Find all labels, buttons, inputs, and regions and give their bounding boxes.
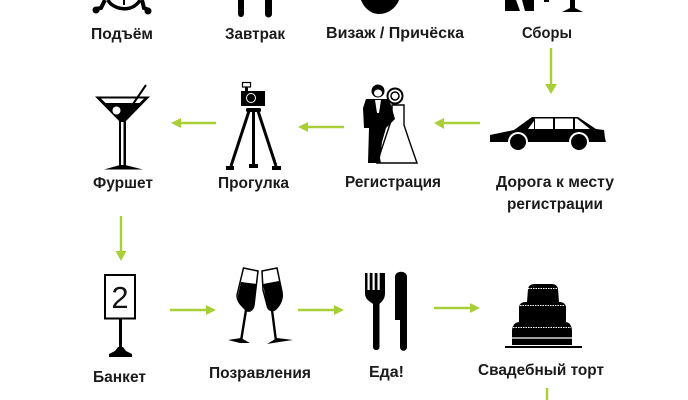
label: Завтрак: [225, 26, 285, 43]
label: Дорога к месту: [496, 174, 614, 191]
step: Сборы: [505, 0, 583, 42]
label: Позравления: [209, 365, 311, 382]
arrow: Позравления to Еда: [298, 305, 344, 315]
step: Свадебный торт: [478, 284, 604, 379]
step: Позравления: [209, 268, 311, 382]
step: Завтрак: [225, 0, 285, 43]
label: Сборы: [522, 25, 572, 42]
label: Прогулка: [218, 175, 289, 192]
icon: bride and groom: [363, 84, 417, 163]
icon: clinking champagne flutes: [228, 268, 293, 344]
step: Дорога к месту регистрации: [490, 117, 614, 213]
step: Еда!: [365, 272, 407, 381]
arrow: Дорога to Регистрация: [434, 118, 480, 129]
step: Визаж / Причёска: [326, 0, 464, 42]
icon: table number stand: 2: [111, 280, 129, 315]
arrow: Еда to торт: [434, 303, 480, 313]
label: Фуршет: [93, 175, 153, 192]
icon: fork and knife: [365, 272, 407, 351]
label: Регистрация: [345, 174, 441, 191]
step: Фуршет: [93, 85, 153, 192]
label: Подъём: [91, 26, 153, 43]
label: Свадебный торт: [478, 362, 604, 379]
arrow: Банкет to Позравления: [170, 305, 216, 315]
icon: cutlery handles: [238, 0, 272, 18]
arrow: торт continues down: [546, 388, 548, 400]
label line 2: регистрации: [507, 196, 603, 213]
icon: camera on tripod: [226, 82, 281, 170]
icon: tiered cake: [505, 284, 582, 348]
icon: suit and stand: [505, 0, 583, 12]
arrow: Регистрация to Прогулка: [298, 122, 344, 132]
icon: martini glass: [95, 85, 150, 170]
icon: limousine: [490, 117, 606, 152]
icon: alarm clock: [92, 0, 152, 14]
step: Прогулка: [218, 82, 289, 192]
step: Регистрация: [345, 84, 441, 191]
label: Еда!: [369, 364, 404, 381]
label: Банкет: [93, 369, 146, 386]
arrow: Прогулка to Фуршет: [171, 118, 216, 128]
label: Визаж / Причёска: [326, 25, 464, 42]
icon: brush: [361, 0, 399, 14]
step: Подъём: [91, 0, 153, 43]
arrow: Сборы to Дорога: [545, 48, 557, 94]
arrow: Фуршет to Банкет: [116, 216, 126, 261]
step: Банкет: [93, 275, 146, 386]
